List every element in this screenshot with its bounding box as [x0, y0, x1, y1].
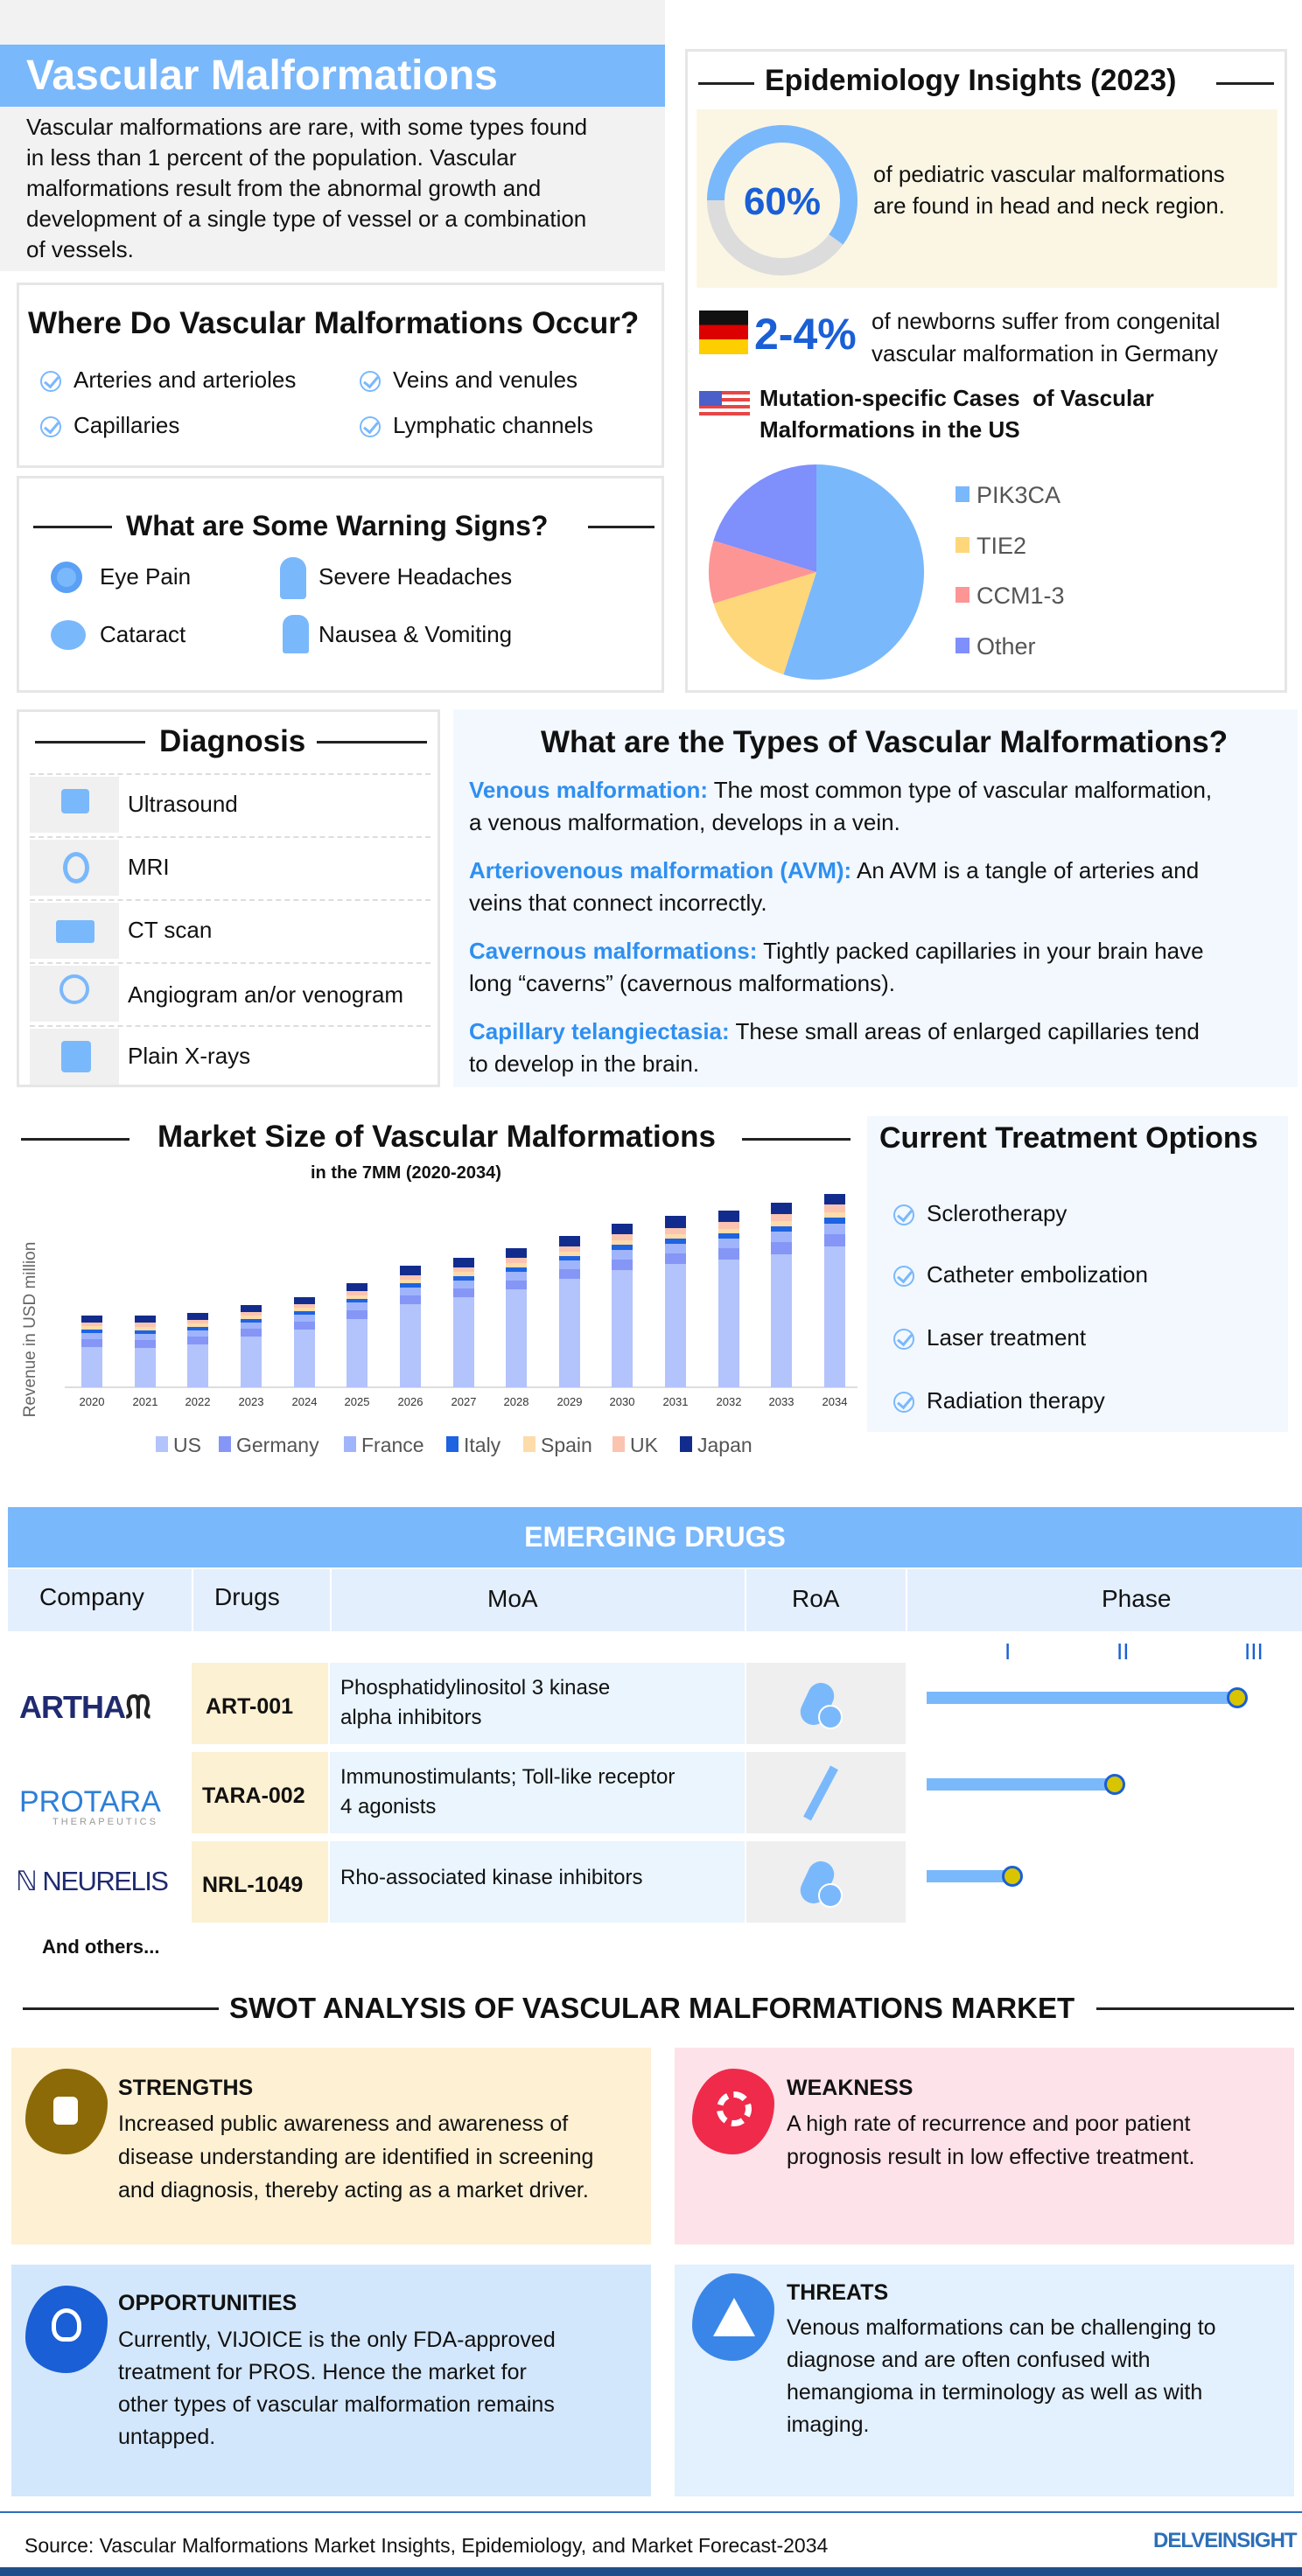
type descriptions: Venous malformation: The most common type of vascular malformation,	[469, 777, 1212, 803]
bar chart: France	[361, 1434, 424, 1456]
sign items: Eye Pain	[100, 563, 191, 590]
type descriptions: veins that connect incorrectly.	[469, 890, 767, 916]
swot: threats: diagnose and are often confused with	[787, 2348, 1151, 2372]
stat text	[873, 161, 1225, 219]
bar chart: 2027	[452, 1395, 476, 1408]
list items	[40, 367, 593, 438]
bar chart: 2025	[345, 1395, 369, 1408]
swot heading: SWOT ANALYSIS OF VASCULAR MALFORMATIONS MARKET	[229, 1992, 1074, 2024]
icon: strength	[25, 2069, 108, 2154]
banner	[8, 1507, 1302, 1567]
swot: opportunities: treatment for PROS. Hence the market for	[118, 2360, 527, 2384]
intro text: in less than 1 percent of the population. Vascular	[26, 144, 516, 171]
icon: cataract	[51, 620, 86, 650]
icon: threat	[692, 2273, 774, 2361]
sign items	[51, 557, 512, 653]
phase labels: I	[1004, 1638, 1011, 1665]
stacked bars	[81, 1194, 845, 1387]
bar chart: 2022	[186, 1395, 210, 1408]
swot: strengths	[11, 2048, 651, 2244]
swot: opportunities: other types of vascular malformation remains	[118, 2392, 555, 2417]
list items: Veins and venules	[393, 367, 578, 393]
banner: EMERGING DRUGS	[524, 1521, 786, 1553]
swot: threats: imaging.	[787, 2412, 870, 2437]
bar chart: 2020	[80, 1395, 104, 1408]
swot heading	[23, 1992, 1294, 2024]
bar chart: Revenue in USD million	[21, 1242, 39, 1417]
type descriptions: a venous malformation, develops in a vein.	[469, 809, 900, 835]
bar chart: UK	[630, 1434, 659, 1456]
diagnosis rows: Plain X-rays	[128, 1043, 250, 1069]
heading: Where Do Vascular Malformations Occur?	[28, 306, 639, 340]
swot: weakness: A high rate of recurrence and poor patient	[787, 2112, 1190, 2136]
row: TARA-002: 4 agonists	[340, 1795, 436, 1819]
intro text: development of a single type of vessel or a combination	[26, 206, 586, 232]
row: TARA-002: PROTARA	[19, 1785, 161, 1819]
header row: RoA	[792, 1585, 839, 1612]
bar chart: 2026	[398, 1395, 423, 1408]
row: NRL-1049	[16, 1841, 1023, 1923]
icon: eye	[51, 562, 82, 593]
pie chart: CCM1-3	[976, 583, 1065, 609]
bar chart: 2032	[717, 1395, 741, 1408]
row: TARA-002: Immunostimulants; Toll-like receptor	[340, 1765, 675, 1789]
icon: us flag	[699, 391, 750, 419]
bar chart: 2023	[239, 1395, 263, 1408]
sign items: Cataract	[100, 621, 186, 647]
treatment list: Laser treatment	[927, 1324, 1086, 1351]
intro text: Vascular malformations are rare, with some types found	[26, 114, 587, 140]
header row	[8, 1569, 1302, 1631]
pie chart: Other	[976, 633, 1036, 660]
germany stat: of newborns suffer from congenital	[872, 308, 1220, 334]
swot: strengths: STRENGTHS	[118, 2076, 253, 2100]
germany stat: vascular malformation in Germany	[872, 340, 1218, 367]
diagnosis rows: CT scan	[128, 917, 212, 943]
phase labels: III	[1244, 1638, 1264, 1665]
type descriptions: to develop in the brain.	[469, 1051, 699, 1077]
intro panel	[0, 0, 665, 271]
panel: where occur	[17, 283, 664, 468]
us mutation heading: Mutation-specific Cases of Vascular	[760, 385, 1154, 411]
bar chart: 2031	[663, 1395, 688, 1408]
treatment list: Radiation therapy	[927, 1387, 1105, 1414]
bar chart	[21, 1194, 858, 1456]
diagnosis rows: Ultrasound	[128, 791, 238, 817]
swot: strengths: and diagnosis, thereby acting as a market driver.	[118, 2178, 589, 2203]
list items: Arteries and arterioles	[74, 367, 296, 393]
treatment list	[893, 1200, 1148, 1414]
pie chart: TIE2	[976, 533, 1026, 559]
row: ART-001	[19, 1663, 1248, 1744]
row: TARA-002	[19, 1752, 1125, 1833]
heading: What are the Types of Vascular Malformations?	[541, 725, 1228, 759]
panel: warning signs	[17, 476, 664, 693]
phase bar	[927, 1692, 1238, 1704]
treatment list: Sclerotherapy	[927, 1200, 1067, 1226]
donut 60%	[707, 125, 858, 276]
pie chart: PIK3CA	[976, 482, 1060, 508]
stat text: of pediatric vascular malformations	[873, 161, 1225, 187]
heading: What are Some Warning Signs?	[126, 510, 548, 541]
bar chart: 2024	[292, 1395, 317, 1408]
us mutation heading	[699, 385, 1154, 443]
bar chart: Germany	[236, 1434, 319, 1456]
row: TARA-002: TARA-002	[202, 1784, 305, 1808]
title	[0, 45, 665, 107]
bar chart: 2033	[769, 1395, 794, 1408]
bar chart: 2030	[610, 1395, 634, 1408]
swot: opportunities: Currently, VIJOICE is the only FDA-approved	[118, 2328, 556, 2352]
list items: Lymphatic channels	[393, 412, 593, 438]
heading: Epidemiology Insights (2023)	[765, 64, 1176, 97]
type descriptions	[469, 777, 1212, 1077]
row: NRL-1049: Rho-associated kinase inhibitors	[340, 1866, 643, 1889]
swot: weakness	[675, 2048, 1294, 2244]
panel: diagnosis	[17, 709, 440, 1087]
swot: threats: THREATS	[787, 2280, 888, 2305]
donut 60%: 60%	[744, 180, 821, 223]
row: ART-001: alpha inhibitors	[340, 1706, 481, 1729]
phase labels	[1004, 1638, 1264, 1665]
phase bar	[927, 1778, 1115, 1791]
map callout	[696, 109, 1278, 288]
diagnosis rows	[30, 773, 430, 1085]
type descriptions: Cavernous malformations: Tightly packed capillaries in your brain have	[469, 938, 1204, 964]
row: NRL-1049: ℕ NEURELIS	[16, 1866, 167, 1896]
swot: threats: hemangioma in terminology as well as with	[787, 2380, 1202, 2405]
diagnosis rows: MRI	[128, 854, 170, 880]
type descriptions: Capillary telangiectasia: These small areas of enlarged capillaries tend	[469, 1018, 1200, 1044]
icon: opportunity	[25, 2286, 108, 2373]
heading: Diagnosis	[159, 724, 305, 758]
row: ART-001: ARTHAᙏ	[19, 1689, 150, 1725]
footer	[0, 2511, 1302, 2574]
subtitle: in the 7MM (2020-2034)	[311, 1163, 501, 1183]
diagnosis rows: Angiogram an/or venogram	[128, 981, 403, 1008]
panel: treatment options	[867, 1116, 1288, 1432]
sign items: Nausea & Vomiting	[318, 621, 512, 647]
heading: Market Size of Vascular Malformations	[158, 1120, 716, 1154]
bar chart: 2029	[557, 1395, 582, 1408]
logo: DELVEINSIGHT	[1153, 2529, 1297, 2552]
sign items: Severe Headaches	[318, 563, 512, 590]
row: TARA-002: THERAPEUTICS	[52, 1817, 158, 1827]
phase labels: II	[1116, 1638, 1129, 1665]
panel: market size	[21, 1120, 858, 1456]
icon: german flag	[699, 311, 748, 354]
bar chart: Spain	[541, 1434, 592, 1456]
swot: threats: Venous malformations can be challenging to	[787, 2315, 1216, 2340]
pie chart	[709, 464, 1065, 680]
phase bar	[927, 1870, 1012, 1882]
swot: opportunities: untapped.	[118, 2425, 215, 2449]
intro text	[26, 114, 587, 262]
bar chart: Japan	[697, 1434, 752, 1456]
row: ART-001: ART-001	[206, 1694, 293, 1719]
heading: Current Treatment Options	[879, 1121, 1258, 1155]
swot: strengths: Increased public awareness and awareness of	[118, 2112, 568, 2136]
swot: threats	[675, 2265, 1294, 2496]
swot: weakness: prognosis result in low effective treatment.	[787, 2145, 1194, 2169]
bar chart: Italy	[464, 1434, 501, 1456]
bar chart: 2028	[504, 1395, 528, 1408]
title: Vascular Malformations	[26, 52, 498, 99]
swot: opportunities	[11, 2265, 651, 2496]
type descriptions: Arteriovenous malformation (AVM): An AVM is a tangle of arteries and	[469, 857, 1199, 883]
germany stat	[699, 308, 1220, 367]
icon: nausea	[283, 615, 309, 653]
row: ART-001: Phosphatidylinositol 3 kinase	[340, 1676, 610, 1700]
bar chart: 2034	[822, 1395, 847, 1408]
emerging drugs table	[8, 1507, 1302, 1958]
intro text: of vessels.	[26, 236, 134, 262]
swot: weakness: WEAKNESS	[787, 2076, 913, 2100]
icon: weakness	[692, 2069, 774, 2154]
and others: And others...	[42, 1936, 159, 1958]
header row: Drugs	[214, 1583, 280, 1610]
source text: Source: Vascular Malformations Market Insights, Epidemiology, and Market Forecast-2034	[24, 2534, 828, 2557]
row: NRL-1049: NRL-1049	[202, 1873, 303, 1897]
swot: strengths: disease understanding are identified in screening	[118, 2145, 593, 2169]
bar chart: US	[173, 1434, 201, 1456]
icon: headache	[280, 557, 306, 599]
bar chart: 2021	[133, 1395, 158, 1408]
header row: MoA	[487, 1585, 538, 1612]
panel: epidemiology	[685, 49, 1287, 693]
intro text: malformations result from the abnormal growth and	[26, 175, 541, 201]
us mutation heading: Malformations in the US	[760, 416, 1020, 443]
list items: Capillaries	[74, 412, 179, 438]
stat text: are found in head and neck region.	[873, 192, 1225, 219]
germany stat: 2-4%	[754, 310, 857, 359]
swot: opportunities: OPPORTUNITIES	[118, 2291, 297, 2315]
treatment list: Catheter embolization	[927, 1261, 1148, 1288]
type descriptions: long “caverns” (cavernous malformations).	[469, 970, 895, 996]
panel: types	[453, 709, 1298, 1087]
header row: Phase	[1102, 1585, 1171, 1612]
header row: Company	[39, 1583, 144, 1610]
